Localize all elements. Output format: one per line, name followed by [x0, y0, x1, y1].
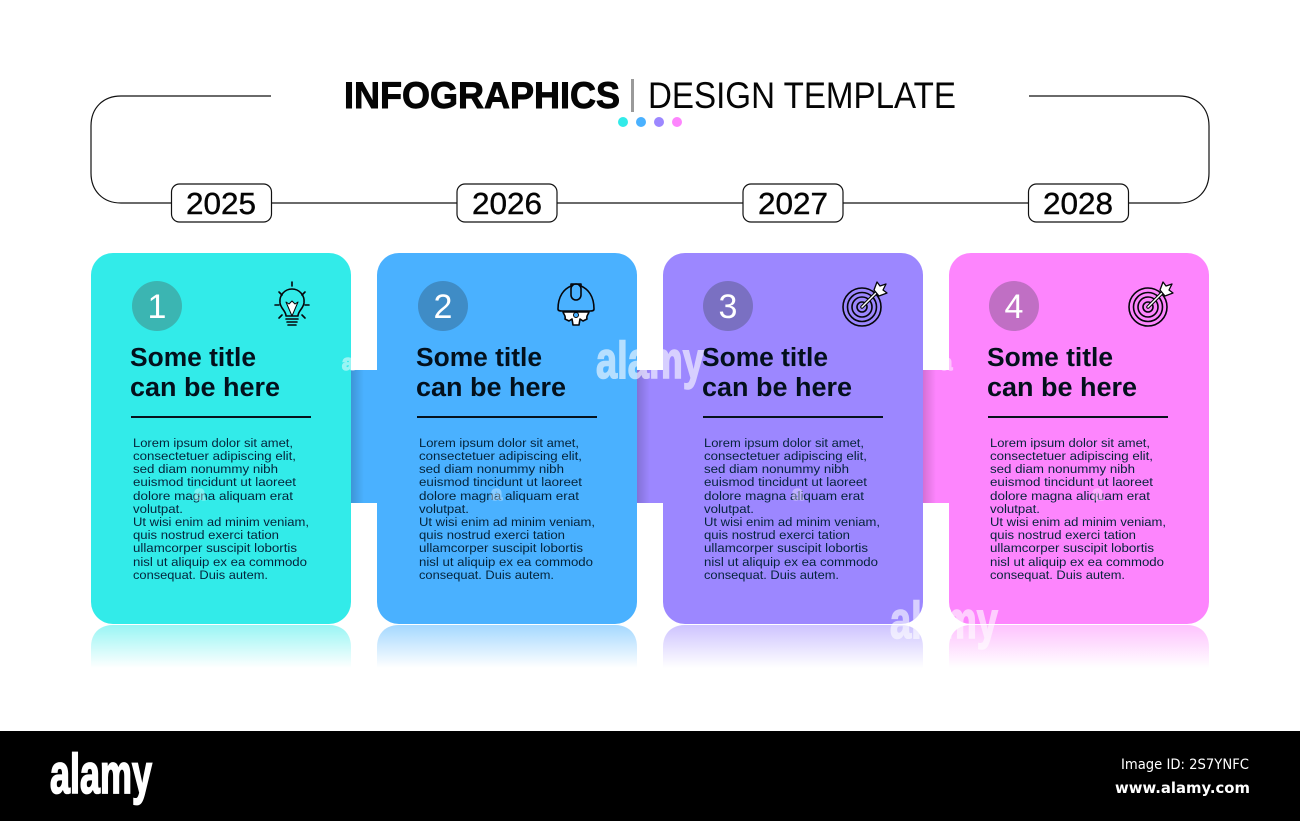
small watermark fragments: a	[1092, 483, 1104, 505]
body text 4	[990, 436, 1166, 582]
card background 4	[949, 253, 1209, 624]
connector 3 to 4	[923, 370, 949, 503]
body text 2: nisl ut aliquip ex ea commodo	[419, 555, 593, 569]
card title 3: Some title	[702, 344, 828, 372]
body text 3: volutpat.	[704, 502, 754, 516]
website: www.alamy.com	[1115, 779, 1250, 797]
card title 1: can be here	[130, 374, 280, 402]
card title 1: Some title	[130, 344, 256, 372]
panel: step 1	[91, 253, 351, 624]
title separator	[631, 79, 634, 112]
title dots	[618, 117, 682, 127]
divider 3	[703, 416, 883, 418]
small watermark fragments: a	[792, 483, 804, 505]
body text 1: consectetuer adipiscing elit,	[133, 449, 296, 463]
timeline line	[91, 96, 1209, 203]
watermark lower right: alamy	[890, 592, 998, 650]
year label 2028	[1028, 184, 1128, 222]
number badge 3: 3	[719, 288, 737, 326]
number badge 1	[132, 281, 182, 331]
number badge 4: 4	[1005, 288, 1023, 326]
body text 1: consequat. Duis autem.	[133, 568, 268, 582]
body text 4: sed diam nonummy nibh	[990, 462, 1135, 476]
body text 4: consequat. Duis autem.	[990, 568, 1125, 582]
body text 3: dolore magna aliquam erat	[704, 489, 865, 503]
icon: target with arrow	[843, 282, 887, 326]
body text 4: consectetuer adipiscing elit,	[990, 449, 1153, 463]
divider 2	[417, 416, 597, 418]
body text 1: dolore magna aliquam erat	[133, 489, 294, 503]
number badge 4	[989, 281, 1039, 331]
number badge 1: 1	[148, 288, 166, 326]
small watermark fragments: a	[940, 350, 953, 375]
small watermark fragments: a	[342, 350, 355, 375]
card background 3	[663, 253, 923, 624]
body text 4: ullamcorper suscipit lobortis	[990, 541, 1154, 555]
body text 1: nisl ut aliquip ex ea commodo	[133, 555, 307, 569]
footer bar	[0, 731, 1300, 821]
body text 2: Lorem ipsum dolor sit amet,	[419, 436, 579, 450]
body text 2: euismod tincidunt ut laoreet	[419, 475, 583, 489]
title	[344, 75, 956, 116]
small watermark fragments	[194, 350, 1104, 505]
body text 3	[704, 436, 880, 582]
card background 2	[377, 253, 637, 624]
body text 1: quis nostrud exerci tation	[133, 528, 279, 542]
number badge 2	[418, 281, 468, 331]
body text 4: nisl ut aliquip ex ea commodo	[990, 555, 1164, 569]
icon: target with arrow (second)	[1129, 282, 1173, 326]
connector 1 to 2	[351, 370, 377, 503]
body text 3: consectetuer adipiscing elit,	[704, 449, 867, 463]
body text 4: volutpat.	[990, 502, 1040, 516]
body text 3: quis nostrud exerci tation	[704, 528, 850, 542]
year label 2027	[743, 184, 843, 222]
card title 1	[130, 344, 280, 402]
body text 4: Ut wisi enim ad minim veniam,	[990, 515, 1166, 529]
title bold part: INFOGRAPHICS	[344, 75, 620, 116]
card title 4	[987, 344, 1137, 402]
watermark centre: alamy	[596, 332, 704, 390]
year label 2026: 2026	[472, 186, 542, 221]
body text 3: euismod tincidunt ut laoreet	[704, 475, 868, 489]
number badge 2: 2	[434, 288, 452, 326]
body text 3: consequat. Duis autem.	[704, 568, 839, 582]
body text 1: Ut wisi enim ad minim veniam,	[133, 515, 309, 529]
number badge 3	[703, 281, 753, 331]
panel: step 3	[663, 253, 923, 624]
card title 4: Some title	[987, 344, 1113, 372]
small watermark fragments: a	[491, 483, 503, 505]
panel: step 4	[949, 253, 1209, 624]
body text 2: dolore magna aliquam erat	[419, 489, 580, 503]
body text 4: Lorem ipsum dolor sit amet,	[990, 436, 1150, 450]
body text 3: ullamcorper suscipit lobortis	[704, 541, 868, 555]
body text 3: nisl ut aliquip ex ea commodo	[704, 555, 878, 569]
card reflections	[91, 625, 1209, 668]
year label 2028: 2028	[1043, 186, 1113, 221]
panel: step 2	[377, 253, 637, 624]
card title 3: can be here	[702, 374, 852, 402]
body text 2: volutpat.	[419, 502, 469, 516]
body text 1: volutpat.	[133, 502, 183, 516]
year label 2027: 2027	[758, 186, 828, 221]
card background 1	[91, 253, 351, 624]
body text 3: Lorem ipsum dolor sit amet,	[704, 436, 864, 450]
body text 4: dolore magna aliquam erat	[990, 489, 1151, 503]
body text 1	[133, 436, 309, 582]
body text 2: Ut wisi enim ad minim veniam,	[419, 515, 595, 529]
body text 2: consequat. Duis autem.	[419, 568, 554, 582]
divider 1	[131, 416, 311, 418]
body text 4: euismod tincidunt ut laoreet	[990, 475, 1154, 489]
body text 2: ullamcorper suscipit lobortis	[419, 541, 583, 555]
year label 2025	[172, 184, 272, 222]
body text 2: quis nostrud exerci tation	[419, 528, 565, 542]
body text 4: quis nostrud exerci tation	[990, 528, 1136, 542]
body text 1: euismod tincidunt ut laoreet	[133, 475, 297, 489]
card title 3	[702, 344, 852, 402]
body text 3: Ut wisi enim ad minim veniam,	[704, 515, 880, 529]
connector 2 to 3	[637, 370, 663, 503]
divider 4	[988, 416, 1168, 418]
icon: light bulb	[275, 282, 309, 325]
footer logo: alamy	[50, 742, 152, 805]
body text 3: sed diam nonummy nibh	[704, 462, 849, 476]
title regular part: DESIGN TEMPLATE	[648, 75, 956, 116]
body text 1: sed diam nonummy nibh	[133, 462, 278, 476]
body text 2	[419, 436, 595, 582]
body text 1: Lorem ipsum dolor sit amet,	[133, 436, 293, 450]
small watermark fragments: a	[194, 483, 206, 505]
card title 2: can be here	[416, 374, 566, 402]
year label 2025: 2025	[186, 186, 256, 221]
icon: helmet with gear	[558, 284, 594, 325]
body text 2: consectetuer adipiscing elit,	[419, 449, 582, 463]
card title 4: can be here	[987, 374, 1137, 402]
card title 2	[416, 344, 566, 402]
card title 2: Some title	[416, 344, 542, 372]
body text 1: ullamcorper suscipit lobortis	[133, 541, 297, 555]
body text 2: sed diam nonummy nibh	[419, 462, 564, 476]
year label 2026	[457, 184, 557, 222]
image id: Image ID: 2S7YNFC	[1121, 757, 1249, 773]
